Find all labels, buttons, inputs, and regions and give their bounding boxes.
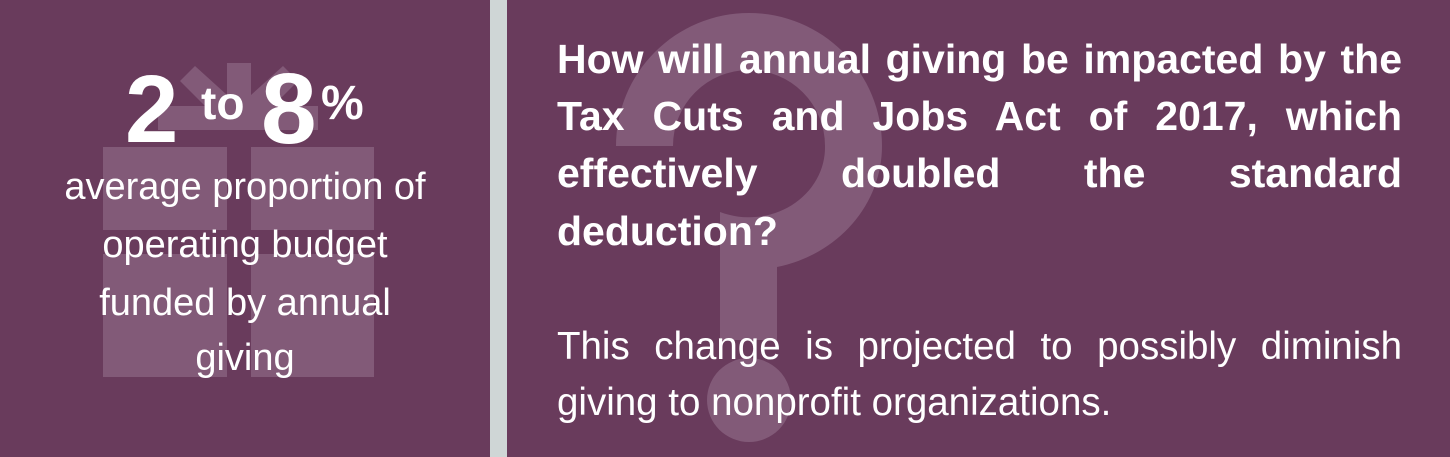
divider [490, 0, 507, 457]
text: statistic description: funded by annual [99, 282, 391, 324]
text: statistic description: giving [195, 337, 295, 379]
heading: question: deduction? [557, 208, 778, 254]
text: statistic description: operating budget [102, 224, 388, 266]
number: 8: 8 [261, 53, 317, 165]
heading: question: How will annual giving be impacted by the [557, 36, 1402, 82]
icon: question mark [616, 13, 882, 442]
headline: 2 to 8% [125, 53, 364, 165]
word: to: to [201, 77, 244, 129]
heading: question: effectively doubled the standard [557, 150, 1402, 196]
text: statistic description [64, 166, 426, 379]
heading: question: Tax Cuts and Jobs Act of 2017, which [557, 93, 1402, 139]
icon: gift box [103, 63, 374, 377]
text: explanation: giving to nonprofit organizations. [557, 381, 1111, 424]
text: explanation [557, 325, 1402, 424]
text: explanation: This change is projected to possibly diminish [557, 325, 1402, 368]
heading: question [557, 36, 1402, 254]
number: 2: 2 [125, 56, 178, 163]
text: statistic description: average proportion of [64, 166, 426, 208]
percent sign: % [321, 77, 364, 130]
panel: left statistic [0, 0, 490, 457]
panel: right question [507, 0, 1450, 457]
